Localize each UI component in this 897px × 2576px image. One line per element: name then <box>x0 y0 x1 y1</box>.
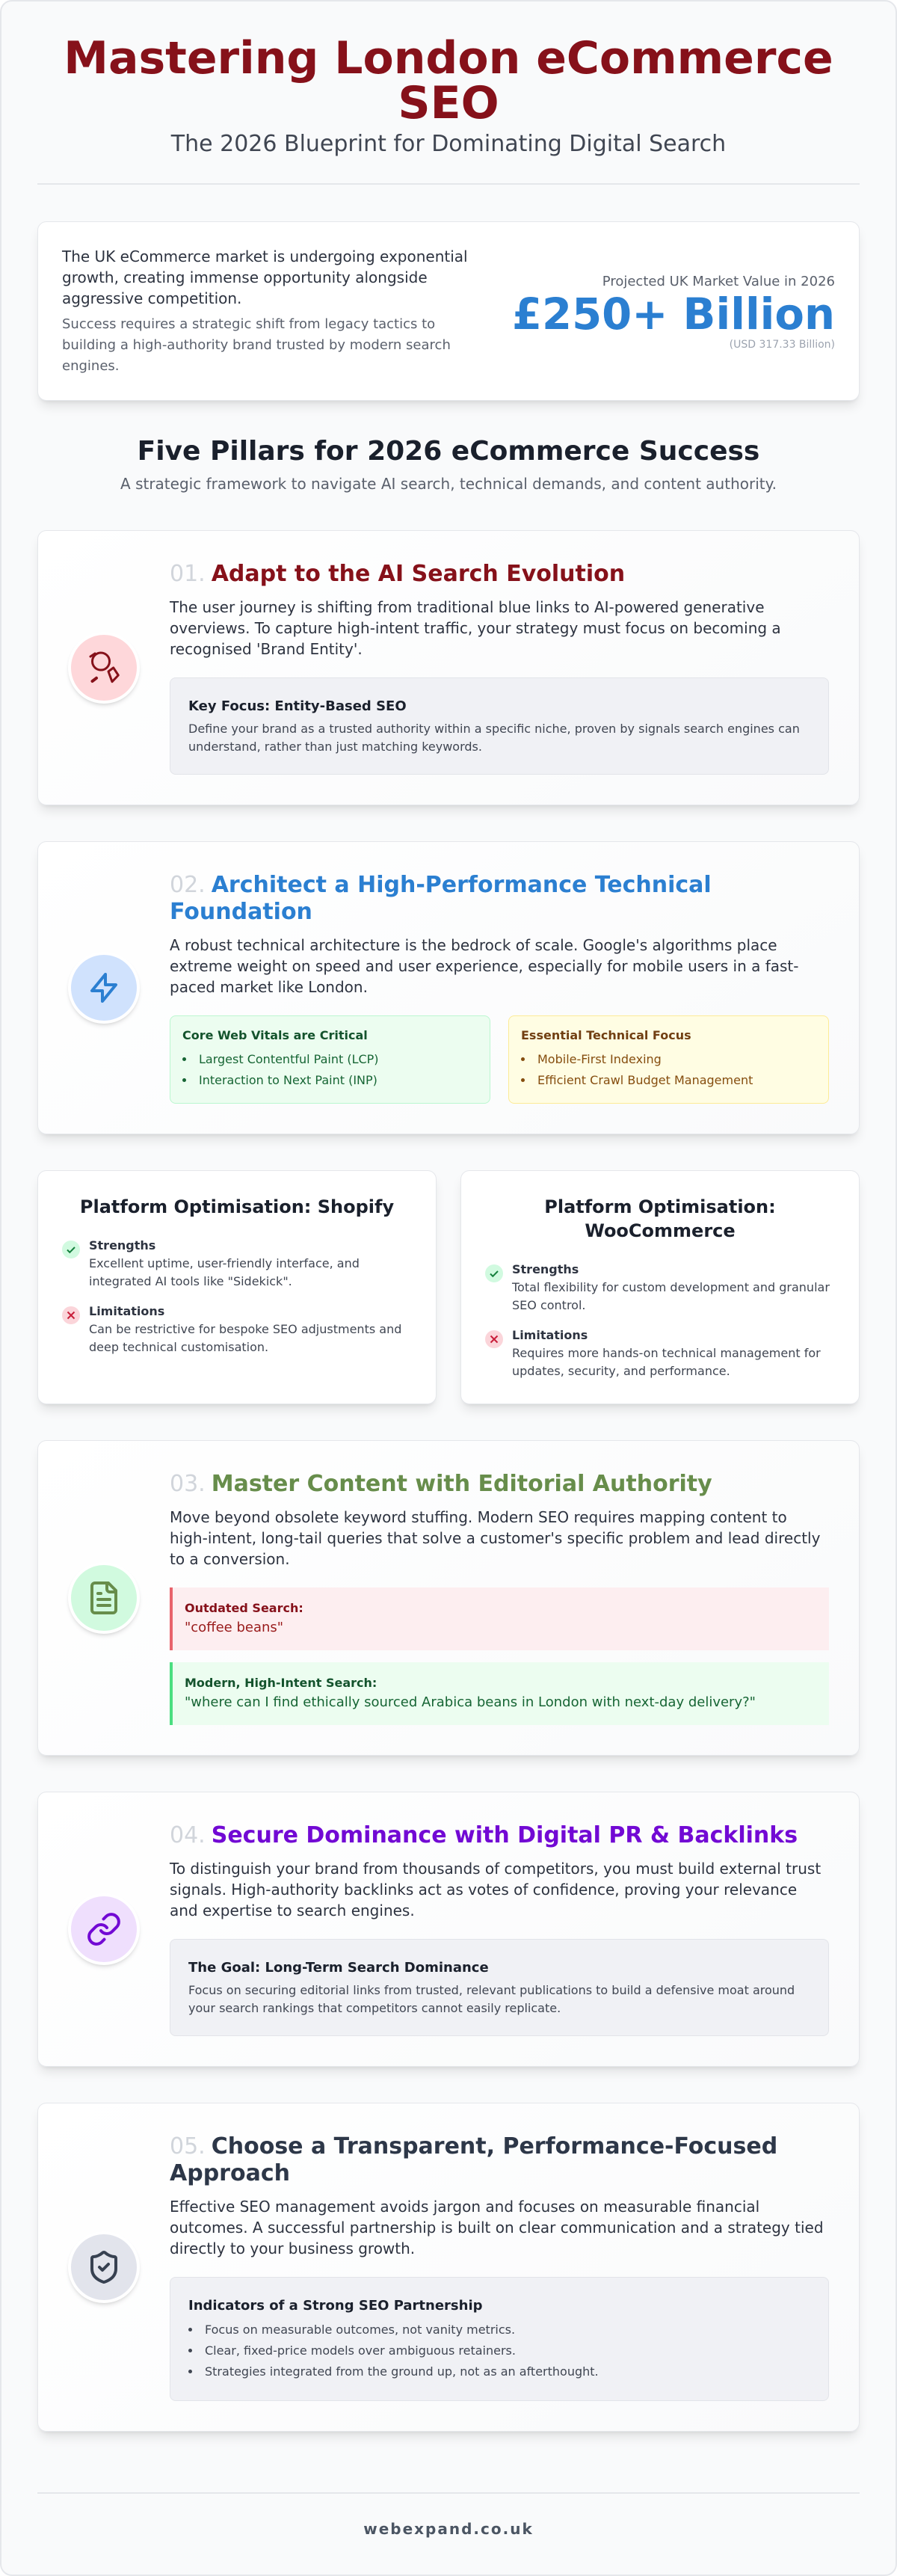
callout heading: Key Focus: Entity-Based SEO <box>188 698 407 714</box>
icon: cross <box>62 1306 80 1324</box>
pillar 4 heading: 04. Secure Dominance with Digital PR & Backlinks <box>170 1822 798 1848</box>
woocommerce strengths: SEO control. <box>512 1298 586 1312</box>
shopify strengths: Strengths <box>89 1238 155 1252</box>
pillar 5 heading <box>170 2133 777 2186</box>
woocommerce strengths: Total flexibility for custom development and granular <box>512 1280 830 1294</box>
woocommerce limitations <box>485 1328 821 1378</box>
stat value: £250+ Billion <box>512 289 835 339</box>
pillar 5 text: Effective SEO management avoids jargon and focuses on measurable financial <box>170 2198 759 2216</box>
callout text: understand, rather than just matching keywords. <box>188 740 482 754</box>
pillar 4 content <box>169 1822 829 2036</box>
shopify limitations: Can be restrictive for bespoke SEO adjustments and <box>89 1322 401 1336</box>
modern label: Modern, High-Intent Search: <box>185 1676 377 1690</box>
goal text: your search rankings that competitors cannot easily replicate. <box>188 2001 561 2015</box>
callout: outdated search <box>170 1587 829 1650</box>
icon: link <box>68 1893 140 1965</box>
shopify strengths: Excellent uptime, user-friendly interface, and <box>89 1256 360 1270</box>
pillar 5 heading: 05. Choose a Transparent, Performance-Focused <box>170 2133 777 2160</box>
title <box>64 32 833 129</box>
pillar 3 text: Move beyond obsolete keyword stuffing. Modern SEO requires mapping content to <box>170 1508 787 1526</box>
icon: check <box>62 1241 80 1258</box>
pillar 1 content <box>169 561 829 775</box>
footer divider line <box>37 2492 860 2494</box>
callout: key focus <box>170 677 829 775</box>
pillar 1 heading: 01. Adapt to the AI Search Evolution <box>170 561 625 587</box>
woocommerce heading: Platform Optimisation: <box>544 1196 776 1217</box>
footer brand: webexpand.co.uk <box>363 2520 534 2538</box>
shopify strengths: integrated AI tools like "Sidekick". <box>89 1274 292 1288</box>
intro supporting paragraph: engines. <box>62 358 120 374</box>
goal text: Focus on securing editorial links from trusted, relevant publications to build a defensive moat around <box>188 1983 795 1997</box>
section subtitle: A strategic framework to navigate AI search, technical demands, and content authority. <box>120 475 777 493</box>
modern query: "where can I find ethically sourced Arabica beans in London with next-day delivery?" <box>185 1694 756 1710</box>
pillar 2 text: A robust technical architecture is the bedrock of scale. Google's algorithms place <box>170 936 777 954</box>
shopify limitations <box>62 1304 401 1354</box>
goal heading: The Goal: Long-Term Search Dominance <box>188 1960 489 1976</box>
two technical callouts <box>170 1015 829 1104</box>
panel: pillar 5 <box>37 2103 860 2432</box>
intro lead paragraph: aggressive competition. <box>62 289 241 307</box>
indicators list: Strategies integrated from the ground up, not as an afterthought. <box>205 2364 599 2379</box>
pillar 5 text: directly to your business growth. <box>170 2240 415 2257</box>
pillar 3 text: high-intent, long-tail queries that solve a customer's specific problem and lead directly <box>170 1529 820 1547</box>
woocommerce heading <box>544 1196 776 1241</box>
icon: lightning bolt <box>68 952 140 1024</box>
pillar 5 content <box>170 2133 829 2401</box>
technical focus list: Efficient Crawl Budget Management <box>537 1073 753 1087</box>
intro lead paragraph <box>61 248 468 307</box>
pillar 2 heading: 02. Architect a High-Performance Technical <box>170 872 712 898</box>
icon: cross <box>485 1330 503 1348</box>
callout: modern search <box>170 1662 829 1725</box>
shopify heading: Platform Optimisation: Shopify <box>80 1196 394 1217</box>
callout: the goal <box>170 1939 829 2036</box>
woocommerce limitations: Limitations <box>512 1328 588 1342</box>
panel: platform shopify <box>37 1170 437 1404</box>
pillar 2 text: extreme weight on speed and user experience, especially for mobile users in a fast- <box>170 957 798 975</box>
pillar 2 heading: Foundation <box>170 899 312 925</box>
icon: magnifier <box>68 632 140 704</box>
core web vitals list <box>182 1052 379 1087</box>
intro supporting paragraph: building a high-authority brand trusted by modern search <box>62 337 451 353</box>
pillar 2 text <box>170 936 798 996</box>
callout: essential technical focus <box>508 1015 829 1104</box>
core web vitals heading: Core Web Vitals are Critical <box>182 1028 368 1042</box>
panel: platform woocommerce <box>460 1170 860 1404</box>
section title: Five Pillars for 2026 eCommerce Success <box>138 436 759 467</box>
shopify strengths <box>62 1238 360 1288</box>
icon: document <box>68 1562 140 1634</box>
technical focus list: Mobile-First Indexing <box>537 1052 662 1066</box>
icon: shield check <box>68 2231 140 2303</box>
pillar 2 text: paced market like London. <box>170 978 368 996</box>
goal text <box>188 1983 795 2015</box>
indicators list: Clear, fixed-price models over ambiguous retainers. <box>205 2343 516 2358</box>
pillar 4 text: and expertise to search engines. <box>170 1902 415 1919</box>
pillar 1 text: overviews. To capture high-intent traffic, your strategy must focus on becoming a <box>170 619 781 637</box>
technical focus list <box>521 1052 753 1087</box>
title: Mastering London eCommerce <box>64 32 833 84</box>
shopify limitations: deep technical customisation. <box>89 1340 268 1354</box>
panel: pillar 4 <box>37 1792 860 2067</box>
panel: pillar 2 <box>37 841 860 1134</box>
intro text block <box>61 248 468 374</box>
woocommerce heading: WooCommerce <box>585 1220 736 1241</box>
pillar 4 text <box>169 1860 821 1919</box>
woocommerce limitations: updates, security, and performance. <box>512 1364 730 1378</box>
core web vitals list: Largest Contentful Paint (LCP) <box>199 1052 379 1066</box>
intro lead paragraph: The UK eCommerce market is undergoing exponential <box>62 248 468 265</box>
market value stat <box>512 274 835 351</box>
pillar 4 text: To distinguish your brand from thousands of competitors, you must build external trust <box>170 1860 821 1878</box>
pillar 1 text: The user journey is shifting from traditional blue links to AI-powered generative <box>170 598 765 616</box>
woocommerce strengths: Strengths <box>512 1262 579 1276</box>
intro lead paragraph: growth, creating immense opportunity alongside <box>62 268 428 286</box>
callout: core web vitals <box>170 1015 490 1104</box>
outdated label: Outdated Search: <box>185 1601 303 1615</box>
stat footnote: (USD 317.33 Billion) <box>730 339 835 351</box>
panel: pillar 3 <box>37 1440 860 1756</box>
pillar 3 content <box>170 1471 829 1725</box>
pillar 3 text <box>170 1508 820 1568</box>
callout text <box>188 722 800 754</box>
section heading <box>120 436 777 493</box>
pillar 5 text: outcomes. A successful partnership is built on clear communication and a strategy tied <box>170 2219 824 2237</box>
pillar 2 heading <box>170 872 712 925</box>
indicators list <box>188 2323 599 2379</box>
pillar 3 text: to a conversion. <box>170 1550 290 1568</box>
indicators heading: Indicators of a Strong SEO Partnership <box>188 2298 483 2314</box>
icon: check <box>485 1264 503 1282</box>
outdated query: "coffee beans" <box>185 1620 283 1635</box>
intro supporting paragraph: Success requires a strategic shift from legacy tactics to <box>62 316 435 332</box>
core web vitals list: Interaction to Next Paint (INP) <box>199 1073 377 1087</box>
pillar 5 text <box>170 2198 824 2257</box>
shopify limitations: Limitations <box>89 1304 164 1318</box>
stat label: Projected UK Market Value in 2026 <box>602 274 835 289</box>
pillar 5 heading: Approach <box>170 2160 290 2186</box>
indicators list: Focus on measurable outcomes, not vanity metrics. <box>205 2323 515 2337</box>
pillar 2 content <box>170 872 829 1104</box>
pillar 1 text <box>169 598 781 658</box>
callout: partnership indicators <box>170 2277 829 2401</box>
pillar 3 heading: 03. Master Content with Editorial Authority <box>170 1471 712 1497</box>
subtitle: The 2026 Blueprint for Dominating Digital Search <box>171 131 726 157</box>
woocommerce limitations: Requires more hands-on technical management for <box>512 1346 821 1360</box>
title: SEO <box>398 77 499 129</box>
pillar 1 text: recognised 'Brand Entity'. <box>170 640 363 658</box>
panel: pillar 1 <box>37 530 860 805</box>
header divider line <box>37 183 860 185</box>
callout text: Define your brand as a trusted authority within a specific niche, proven by signals search engines can <box>188 722 800 736</box>
woocommerce strengths <box>485 1262 830 1312</box>
pillar 4 text: signals. High-authority backlinks act as votes of confidence, proving your relevance <box>170 1881 797 1899</box>
panel: market intro <box>37 221 860 401</box>
intro supporting paragraph <box>62 316 451 374</box>
technical focus heading: Essential Technical Focus <box>521 1028 691 1042</box>
